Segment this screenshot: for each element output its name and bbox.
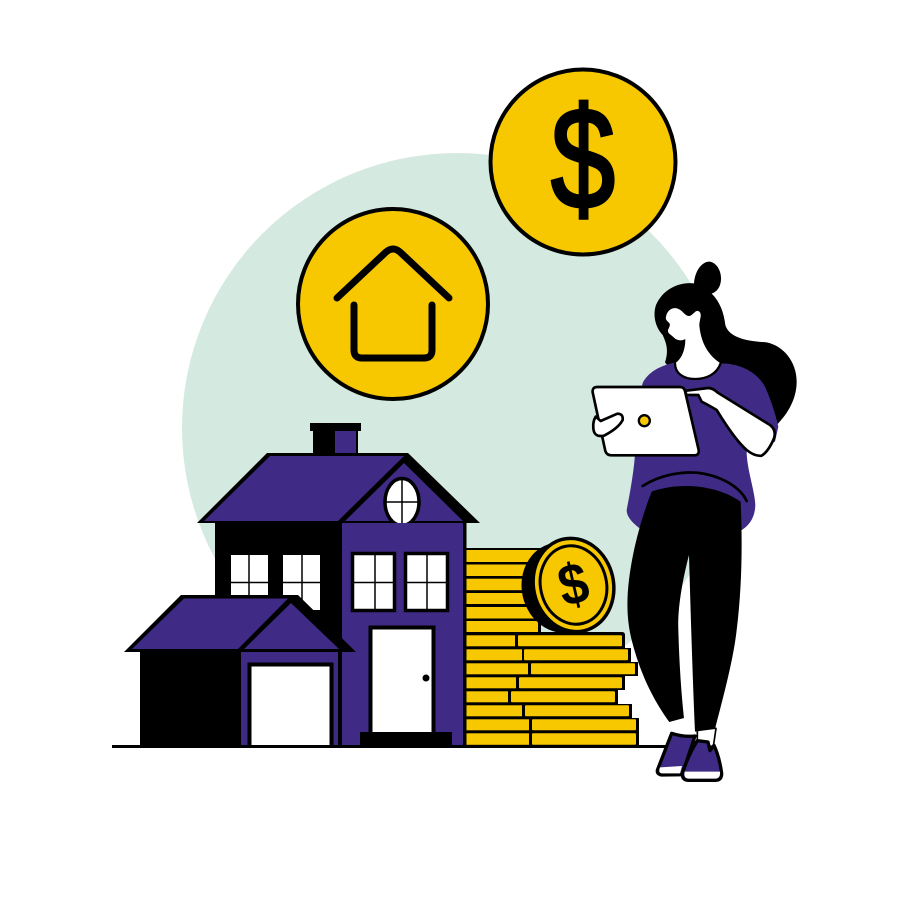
pants bbox=[627, 486, 742, 732]
chimney bbox=[310, 423, 361, 456]
background circle bbox=[182, 153, 732, 703]
right sock bbox=[697, 728, 716, 747]
front door bbox=[360, 628, 452, 746]
shirt bbox=[627, 362, 778, 531]
legs and shoes bbox=[657, 717, 722, 780]
woman with tablet bbox=[593, 262, 797, 780]
coin stack bbox=[466, 548, 639, 746]
right shoe bbox=[682, 741, 722, 780]
collar bbox=[675, 363, 721, 379]
black wall with windows bbox=[215, 522, 343, 746]
ground line bbox=[112, 745, 668, 748]
shirt hem line bbox=[643, 472, 747, 501]
left hand bbox=[593, 414, 623, 436]
hair bbox=[655, 262, 797, 425]
face and neck bbox=[666, 308, 721, 379]
garage wall bbox=[140, 651, 342, 746]
purple wall bbox=[342, 523, 464, 746]
front windows bbox=[352, 553, 448, 611]
round attic window bbox=[385, 478, 419, 526]
upper body details bbox=[593, 308, 775, 501]
tablet bbox=[593, 387, 699, 455]
right arm bbox=[686, 388, 775, 456]
left sock bbox=[668, 717, 694, 736]
icon: standing dollar coin bbox=[512, 530, 623, 642]
garage roof bbox=[124, 595, 356, 652]
garage door bbox=[250, 664, 332, 746]
icon: house coin bbox=[298, 209, 488, 399]
icon: dollar coin bbox=[490, 70, 676, 254]
icon: dollar coin: $ bbox=[551, 78, 615, 239]
icon: standing dollar coin: $ bbox=[552, 549, 595, 619]
house bbox=[124, 423, 480, 746]
main roof bbox=[197, 453, 480, 523]
left shoe bbox=[657, 733, 695, 775]
wall edge bbox=[463, 521, 466, 746]
